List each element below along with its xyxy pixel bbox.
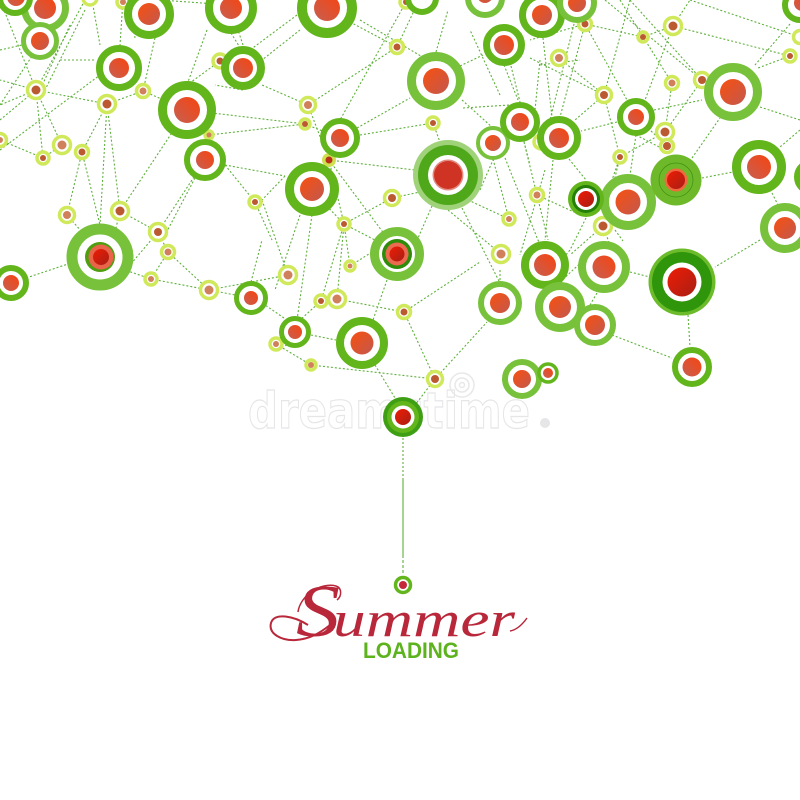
large target node left bbox=[72, 229, 128, 285]
title node bbox=[396, 578, 410, 592]
connector middle segment bbox=[402, 480, 404, 555]
small node row left bbox=[0, 0, 261, 298]
watermark: dreamstime bbox=[248, 382, 530, 440]
target node centre bbox=[374, 232, 420, 276]
green nodes: top-left group bbox=[0, 0, 266, 312]
green nodes: centre group bbox=[282, 0, 537, 365]
connector lower segment bbox=[402, 555, 404, 574]
title: Summer: S bbox=[296, 571, 340, 653]
green nodes: right group bbox=[505, 0, 800, 396]
title: Summer: ummer bbox=[333, 591, 516, 647]
bottom hub node bbox=[383, 397, 423, 437]
big red node bbox=[648, 248, 716, 316]
target node right bbox=[650, 154, 702, 206]
small node row centre bbox=[270, 0, 515, 386]
connector to Summer node bbox=[402, 438, 404, 480]
small yellow nodes bbox=[0, 0, 800, 386]
title: Summer bbox=[271, 571, 527, 653]
network links bbox=[0, 0, 305, 298]
small node row right bbox=[530, 18, 800, 234]
highlighted central node bbox=[413, 140, 483, 210]
dark ring node bbox=[568, 181, 604, 217]
subtitle: LOADING: LOADING bbox=[363, 638, 459, 663]
